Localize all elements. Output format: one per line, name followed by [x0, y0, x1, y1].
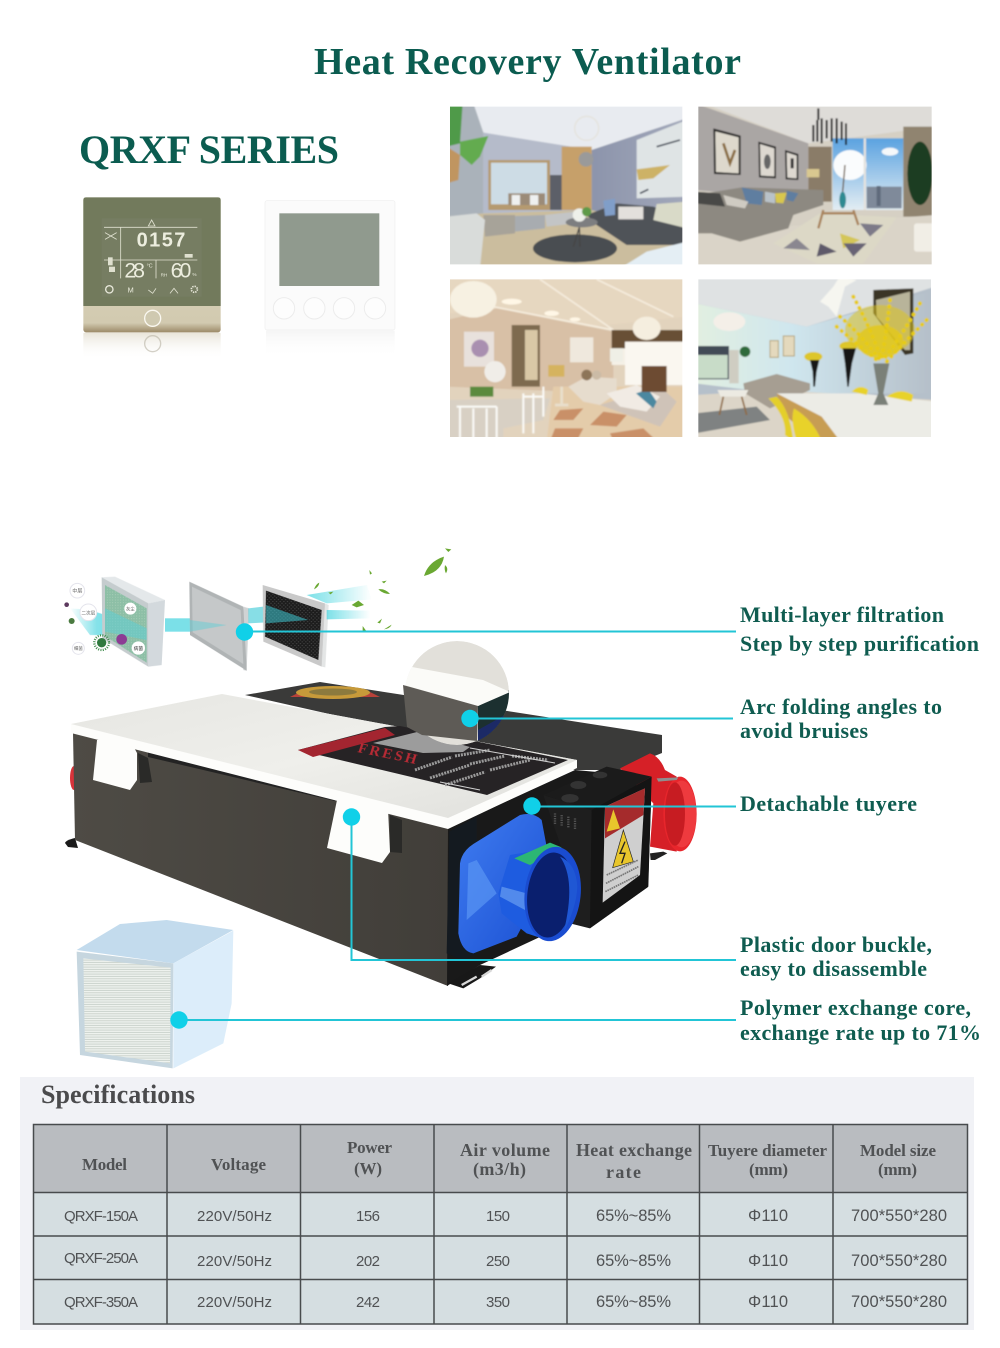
control box with warning label — [543, 767, 652, 928]
airborne particle labels: 灰尘 — [126, 606, 135, 613]
callout: filtration: Step by step purification — [740, 631, 979, 656]
icon: gold thermostat controller: °C — [147, 263, 153, 269]
black end face — [447, 770, 652, 986]
filter 1 — [102, 577, 165, 667]
title: Heat Recovery Ventilator — [314, 41, 741, 83]
heading: specifications: Specifications — [41, 1080, 195, 1109]
table: specifications grid — [33, 1124, 968, 1324]
photo: warm beige living room — [447, 276, 687, 441]
heading: QRXF series: QRXF SERIES — [79, 127, 339, 172]
airborne particle labels: 细菌 — [74, 645, 83, 652]
mounting foot left — [65, 838, 78, 848]
table row: QRXF-250A: Φ110 — [748, 1252, 788, 1270]
table header row: (mm) — [878, 1160, 917, 1179]
table row: QRXF-350A: Φ110 — [748, 1293, 788, 1311]
table row: QRXF-350A: 65%~85% — [596, 1293, 671, 1311]
callout: filtration — [740, 602, 979, 656]
front blue duct — [447, 814, 585, 960]
callout leader lines — [179, 632, 736, 1020]
photo: dining room with yellow flowers — [695, 276, 935, 441]
table header row: Air volume — [460, 1140, 550, 1160]
table row: QRXF-350A: 220V/50Hz — [197, 1294, 272, 1311]
icon: polymer exchange core — [77, 920, 233, 1068]
table row: QRXF-350A: 700*550*280 — [851, 1293, 947, 1311]
filter 3 — [263, 585, 329, 667]
table row: QRXF-150A — [64, 1207, 947, 1225]
table header row: Heat exchange — [576, 1140, 692, 1160]
callout: exchange core: exchange rate up to 71% — [740, 1020, 981, 1045]
table row: QRXF-250A: 700*550*280 — [851, 1252, 947, 1270]
callout: door buckle — [740, 932, 932, 981]
table header row: (m3/h) — [473, 1159, 526, 1180]
callout dots — [170, 623, 541, 1029]
icon: white thermostat controller — [265, 201, 395, 357]
airborne particle labels — [64, 583, 145, 655]
table header row: Voltage — [211, 1155, 266, 1174]
table row: QRXF-250A: 250 — [486, 1253, 510, 1270]
table row: QRXF-350A — [64, 1293, 947, 1311]
icon: gold thermostat controller — [83, 197, 221, 359]
callout: door buckle: Plastic door buckle, — [740, 932, 932, 957]
table row: QRXF-150A: 220V/50Hz — [197, 1208, 272, 1225]
callout: tuyere: Detachable tuyere — [740, 791, 917, 816]
icon: gold thermostat controller: RH — [161, 273, 167, 278]
black nameplate — [298, 726, 568, 795]
icon: gold thermostat controller: M — [128, 286, 134, 295]
table header row — [82, 1138, 936, 1182]
table row: QRXF-250A: 65%~85% — [596, 1252, 671, 1270]
dark side panel — [73, 733, 448, 986]
icon: gold thermostat controller: 60 — [171, 258, 191, 282]
icon: gold thermostat controller: 0157 — [137, 230, 185, 252]
table row: QRXF-350A: 350 — [486, 1294, 510, 1311]
product: ventilator unit body — [65, 641, 697, 988]
table row: QRXF-150A: Φ110 — [748, 1207, 788, 1225]
rear black top surface — [245, 682, 662, 770]
mounting foot right — [448, 965, 496, 988]
right door buckle — [327, 800, 402, 863]
filter 2 — [189, 582, 249, 671]
table row: QRXF-150A: 150 — [486, 1208, 510, 1225]
callout: door buckle: easy to disassemble — [740, 956, 927, 981]
table header row: rate — [606, 1162, 641, 1182]
icon: gold thermostat controller: % — [192, 272, 196, 277]
callout: arc folding: Arc folding angles to — [740, 694, 942, 719]
table header row: Model size — [860, 1141, 936, 1160]
callout: exchange core — [740, 995, 981, 1045]
callout: arc folding — [740, 694, 942, 743]
black nameplate: FRESH — [356, 741, 419, 768]
icon: filter stack with purified air flow — [64, 548, 451, 671]
table row: QRXF-150A: 65%~85% — [596, 1207, 671, 1225]
callout: exchange core: Polymer exchange core, — [740, 995, 971, 1020]
callout: filtration: Multi-layer filtration — [740, 602, 944, 627]
icon: leaves — [314, 548, 451, 632]
table header row: (mm) — [749, 1160, 788, 1179]
table row: QRXF-350A: 242 — [356, 1294, 380, 1311]
airborne particle labels: 二次层 — [81, 609, 96, 616]
white lid — [71, 694, 577, 829]
table header row: Power — [347, 1138, 392, 1157]
airborne particle labels: 病菌 — [134, 645, 143, 652]
table row: QRXF-250A: 220V/50Hz — [197, 1253, 272, 1270]
red rear bump — [70, 766, 78, 790]
table row: QRXF-150A: 156 — [356, 1208, 380, 1225]
table row: QRXF-150A: 700*550*280 — [851, 1207, 947, 1225]
table row: QRXF-250A — [64, 1250, 947, 1270]
photo: grey sofa room with window — [695, 103, 935, 268]
table row: QRXF-250A: 202 — [356, 1253, 380, 1270]
table row: QRXF-350A: QRXF-350A — [64, 1294, 138, 1311]
photo: blue-grey living room — [447, 103, 687, 268]
zoom lens: arc folding corner — [403, 641, 510, 750]
left door buckle — [93, 740, 152, 790]
table header row: Tuyere diameter — [708, 1141, 827, 1160]
table header row: Model — [82, 1155, 127, 1174]
airborne particle labels: 中层 — [72, 588, 82, 595]
rear red duct — [620, 753, 697, 860]
table header row: (W) — [354, 1159, 382, 1178]
panel: specifications — [20, 1077, 974, 1330]
table row: QRXF-250A: QRXF-250A — [64, 1250, 138, 1267]
icon: gold thermostat controller: 28 — [124, 258, 145, 282]
gold certificate seal — [290, 686, 380, 699]
table row: QRXF-150A: QRXF-150A — [64, 1208, 138, 1225]
callout: arc folding: avoid bruises — [740, 718, 868, 743]
